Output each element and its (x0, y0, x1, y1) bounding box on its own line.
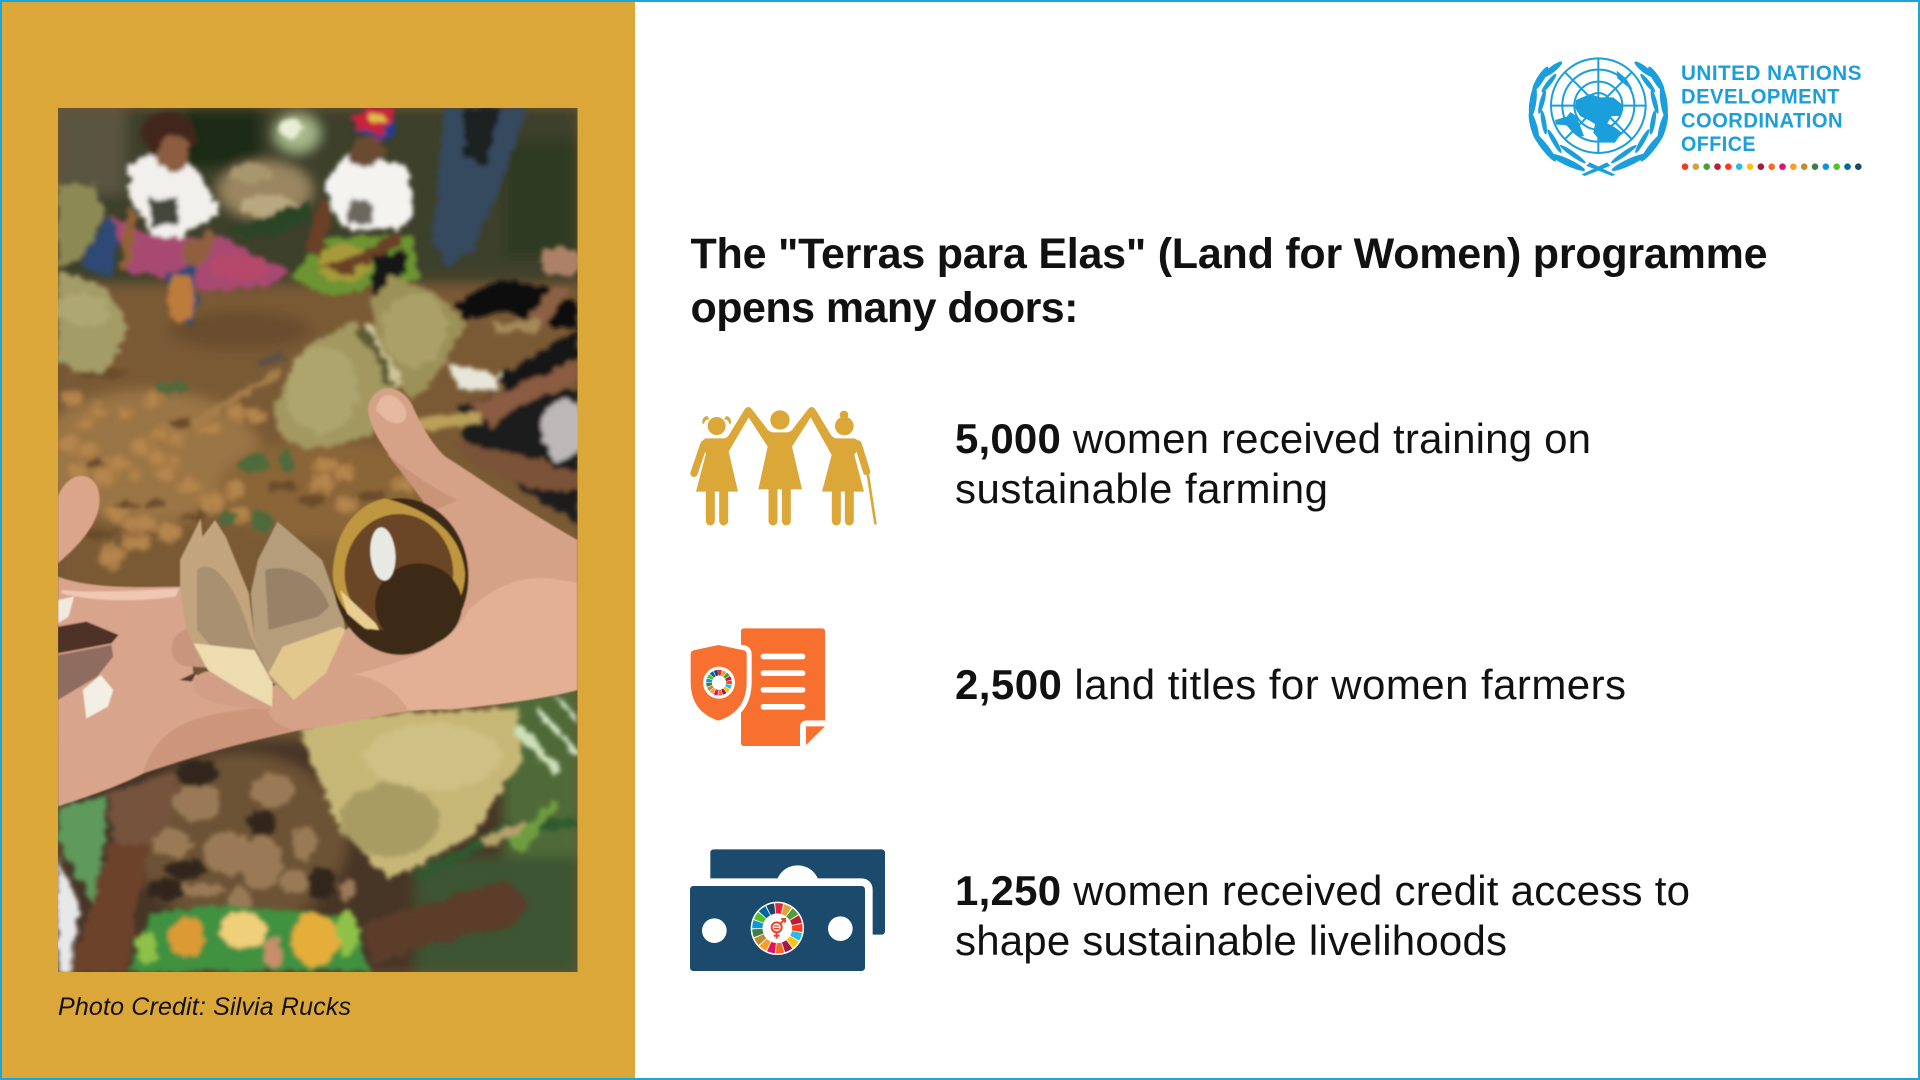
photo credit: Photo Credit: Silvia Rucks (58, 993, 351, 1021)
right hand thumb and palm (269, 388, 577, 730)
icon: banknotes with SDG wheel (686, 849, 885, 975)
item: credit access statistic (686, 849, 1690, 975)
logo wordmark (1681, 61, 1862, 156)
stat text: 5,000 women received training on (955, 415, 1591, 462)
item: land titles statistic (691, 628, 1626, 747)
logo wordmark: OFFICE (1681, 132, 1756, 156)
SDG coloured dots (1682, 163, 1862, 170)
left baskets (58, 185, 106, 267)
shell halves (179, 518, 262, 668)
litter leaves (240, 195, 297, 218)
stat text: sustainable farming (955, 465, 1328, 512)
fingers (172, 630, 206, 668)
title: The "Terras para Elas" (Land for Women) programme (690, 230, 1768, 278)
photo: women gathering Brazil nuts, hands holding open shells (33, 108, 585, 973)
stick (186, 368, 283, 428)
title (690, 230, 1768, 332)
lower scene (58, 797, 108, 907)
person 3 jeans (433, 108, 526, 267)
stat text: 2,500 land titles for women farmers (955, 661, 1626, 708)
logo wordmark: DEVELOPMENT (1681, 84, 1840, 108)
logo wordmark: COORDINATION (1681, 108, 1843, 132)
stat text: 1,250 women received credit access to (955, 867, 1690, 914)
icon: three women holding hands (694, 407, 875, 523)
stat text (955, 415, 1591, 512)
stat text: shape sustainable livelihoods (955, 917, 1507, 964)
left hand (58, 476, 100, 570)
icon: UN emblem (1527, 58, 1670, 176)
right sitters (454, 280, 577, 330)
panel: gold photo panel (0, 0, 635, 1080)
stat text (955, 867, 1690, 964)
centre baskets (369, 275, 467, 402)
logo wordmark: UNITED NATIONS (1681, 61, 1862, 85)
shells on left palm (58, 622, 119, 653)
person 1 (81, 215, 120, 278)
whole nut with white kernel (333, 498, 469, 655)
title: opens many doors: (690, 284, 1078, 332)
item: training statistic (694, 407, 1591, 523)
logo: UN Development Coordination Office (1527, 58, 1862, 176)
icon: land title document with shield (691, 628, 827, 747)
person 2 (290, 235, 420, 297)
nuts (58, 392, 414, 567)
